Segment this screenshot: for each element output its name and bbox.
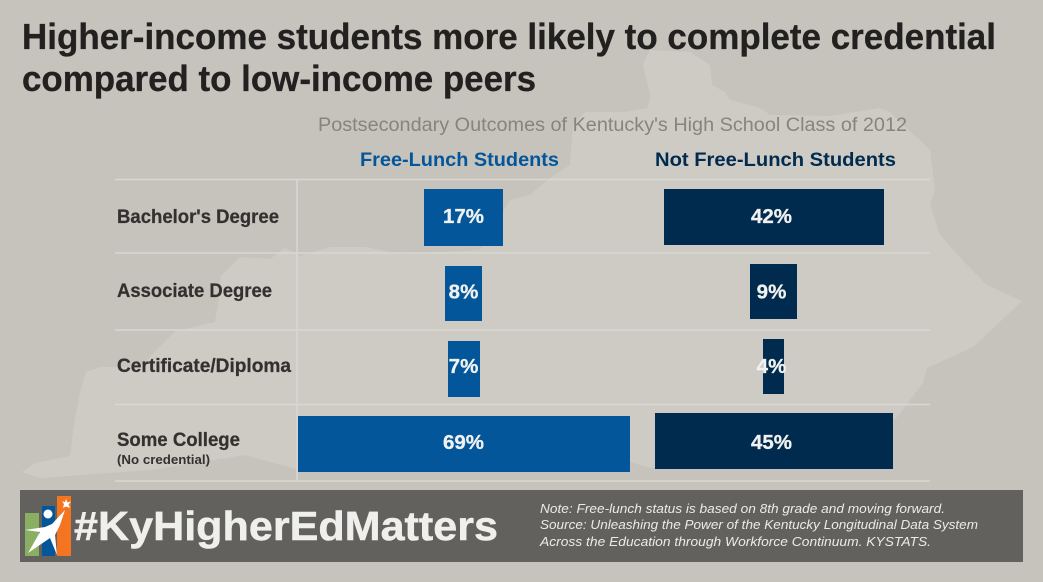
row: Some College (No credential): (No credential) (117, 452, 210, 467)
note and source: Source: Unleashing the Power of the Kentucky Longitudinal Data System (540, 518, 978, 532)
row: Associate Degree: 8% (449, 280, 478, 304)
title: compared to low-income peers (22, 58, 536, 99)
note and source: Across the Education through Workforce Continuum. KYSTATS. (539, 535, 931, 549)
row: Some College (No credential): 69% (443, 431, 484, 454)
icon: KY higher ed logo (25, 496, 71, 556)
column heading: free-lunch students: Free-Lunch Students (360, 150, 559, 171)
row: Certificate/Diploma: Certificate/Diploma (117, 355, 291, 377)
title: Higher-income students more likely to complete credential (22, 16, 996, 57)
title (22, 16, 996, 99)
note and source: Note: Free-lunch status is based on 8th grade and moving forward. (540, 502, 945, 516)
note and source (539, 502, 978, 549)
row: Bachelor's Degree (117, 189, 884, 246)
row: Some College (No credential): Some College (117, 429, 240, 451)
row: Certificate/Diploma (117, 339, 786, 397)
row: Associate Degree: Associate Degree (117, 280, 272, 302)
background map: Kentucky silhouette (22, 50, 1022, 478)
footer band (20, 490, 1023, 562)
row: Bachelor's Degree: Bachelor's Degree (117, 206, 279, 228)
column heading: not free-lunch students: Not Free-Lunch Students (655, 150, 896, 171)
row: Associate Degree: 9% (757, 280, 786, 304)
row: Certificate/Diploma: 4% (757, 355, 786, 378)
row: Some College (No credential): 45% (751, 431, 792, 454)
row: Associate Degree (117, 264, 797, 321)
chart subtitle: Postsecondary Outcomes of Kentucky's High School Class of 2012 (318, 115, 907, 136)
row: Certificate/Diploma: 7% (449, 355, 478, 378)
hashtag: #KyHigherEdMatters (74, 503, 498, 549)
row: Bachelor's Degree: 17% (443, 205, 484, 228)
row: Bachelor's Degree: 42% (751, 205, 792, 228)
row: Some College (No credential) (117, 413, 893, 472)
